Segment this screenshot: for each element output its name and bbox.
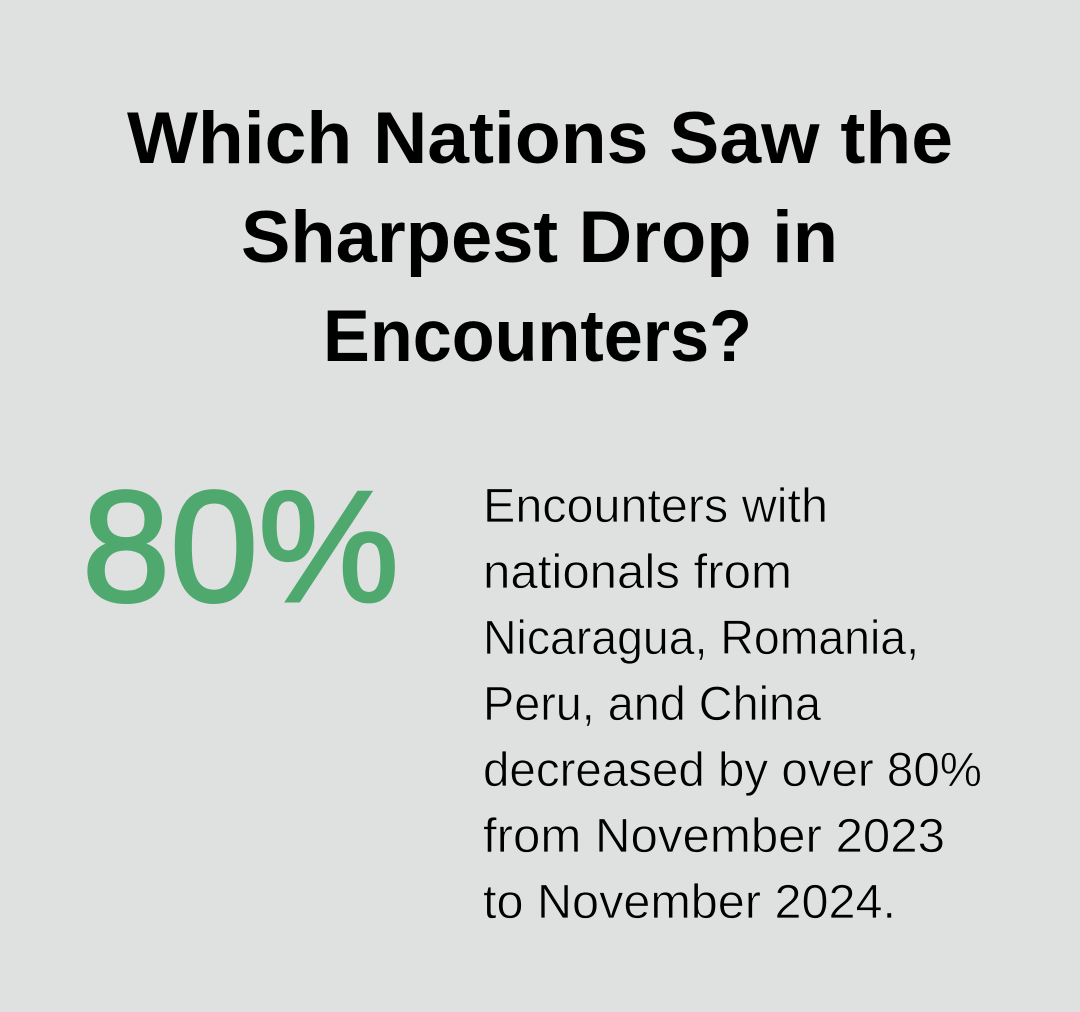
description text: decreased by over 80% (483, 744, 982, 797)
description text: Nicaragua, Romania, (483, 612, 919, 665)
description text: Encounters with (483, 480, 828, 533)
title: Which Nations Saw the (127, 98, 953, 179)
title: Encounters? (323, 296, 752, 377)
big statistic: 80%: 80% (82, 459, 399, 635)
description text: from November 2023 (483, 810, 945, 863)
description text: Peru, and China (483, 678, 821, 731)
description text: to November 2024. (483, 876, 896, 929)
title: Sharpest Drop in (241, 197, 838, 278)
description text (483, 480, 982, 929)
description text: nationals from (483, 546, 792, 599)
title (127, 98, 953, 377)
